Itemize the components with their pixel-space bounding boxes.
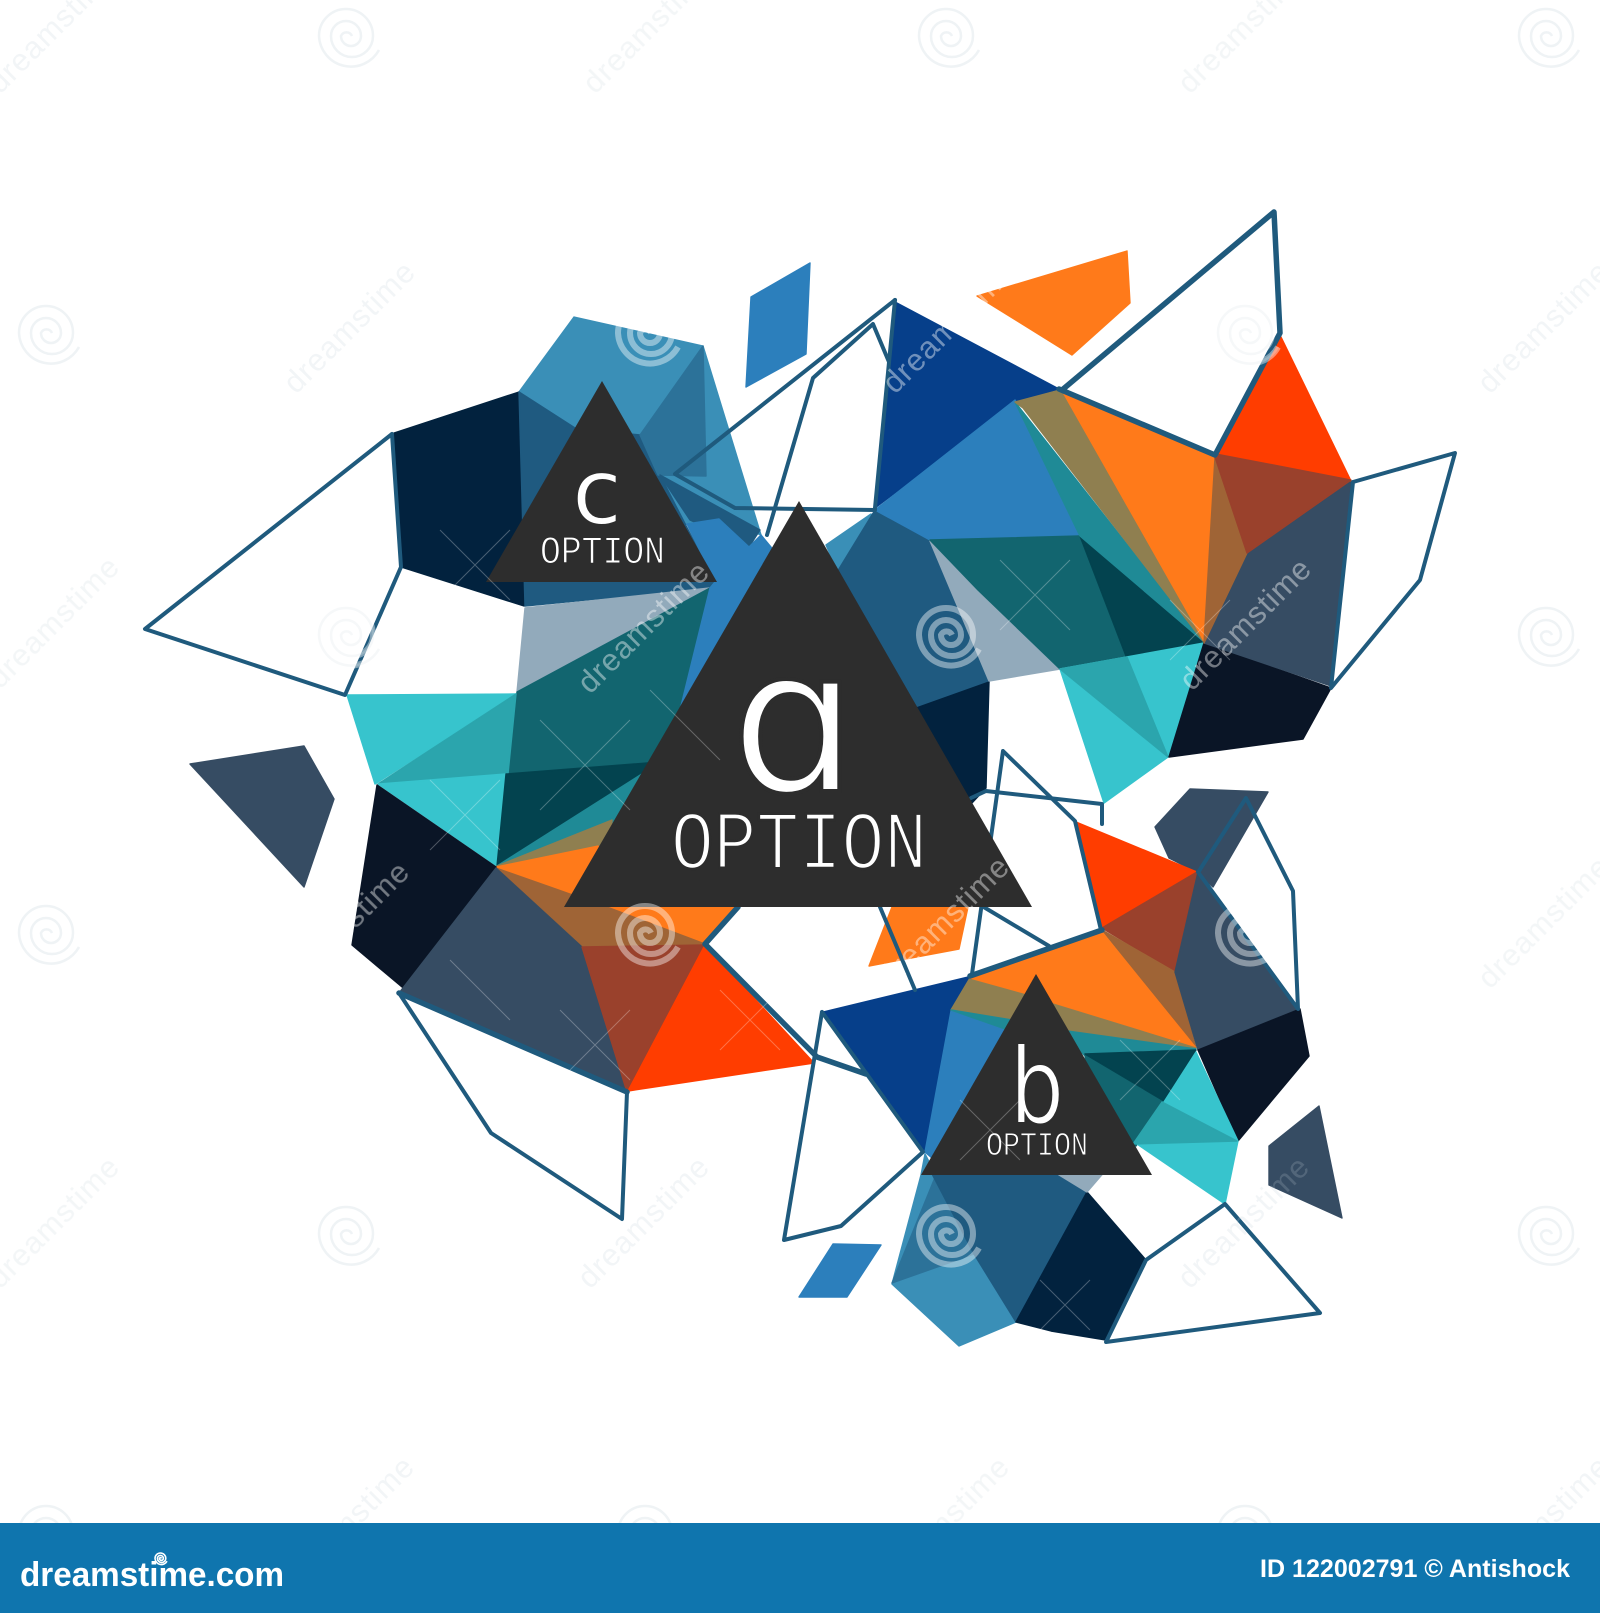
footer logo text: dreamstime.com: [20, 1556, 284, 1594]
watermark: strong spirals over colour: [319, 306, 1278, 1265]
facet: mid cyan: [1060, 657, 1168, 757]
facet: right tan: [1040, 1000, 1196, 1048]
panel: option b triangle: [921, 974, 1152, 1175]
outline: center kite: [972, 751, 1101, 974]
facet: red brown: [1102, 872, 1197, 972]
triangle a: [564, 501, 1032, 907]
facet: navy hexagon: [394, 392, 524, 606]
facet: brown: [496, 868, 705, 947]
outline: center short diagonal: [982, 906, 1049, 946]
facet: teal band: [1060, 1030, 1196, 1056]
facet: dark blue lower: [930, 1170, 1101, 1322]
facet: bright blue: [925, 1011, 1012, 1165]
facet: red: [628, 945, 814, 1091]
facet: brown: [1102, 930, 1196, 1048]
facet: brown: [1204, 457, 1247, 643]
outline: upper middle: [675, 300, 895, 510]
facet: black navy: [352, 785, 496, 992]
facet: mid blue upper right: [640, 346, 706, 476]
watermark: diagonal wordmarks: dreamstime: [1172, 551, 1319, 697]
facet: red: [1076, 822, 1197, 928]
shard: slate right: [1269, 1106, 1342, 1218]
facet: mid cyan: [378, 694, 516, 784]
facet: teal: [930, 536, 1126, 669]
letter c: c: [572, 440, 622, 545]
watermark: diagonal wordmarks: dreamstime: [276, 254, 423, 400]
footer background: [0, 1523, 1600, 1613]
facet: pale gray: [930, 541, 1060, 681]
facet: navy: [905, 682, 989, 804]
shard: blue parallelogram top: [746, 263, 810, 387]
outline: center diagonal: [880, 907, 915, 990]
facet: orange: [970, 932, 1196, 1048]
facet: medium blue behind triangle a: [826, 514, 880, 600]
facet: slate: [399, 868, 627, 1092]
facet: orange: [496, 846, 738, 944]
facet: mid blue wedge: [892, 1175, 974, 1283]
outline: center box: [971, 791, 1102, 824]
outline: slate lower edge: [399, 993, 627, 1092]
facet: cyan: [1060, 643, 1204, 803]
facet: tan band: [497, 820, 612, 866]
facet: slate: [1204, 481, 1353, 686]
facet: teal: [508, 588, 710, 775]
footer band: [0, 1523, 1600, 1613]
footer credit: ID 122002791 © Antishock: [1260, 1555, 1570, 1583]
facet: left tan: [951, 978, 1030, 1022]
facet: deep blue: [823, 976, 972, 1152]
icon: footer spiral: [155, 1553, 167, 1565]
label a: OPTION: [671, 799, 927, 893]
facet: teal band: [1015, 402, 1203, 641]
outline: lower middle: [784, 1012, 923, 1240]
facet: dark blue: [820, 510, 991, 712]
panel: option c triangle: [486, 381, 717, 582]
facet: teal: [1085, 1054, 1165, 1146]
outline: band above option b: [970, 930, 1102, 976]
cluster: option c polygon group: [394, 317, 761, 606]
shard: slate left: [190, 746, 334, 887]
floating shards: [190, 251, 1342, 1297]
shard: orange top: [977, 251, 1130, 355]
shard: orange center: [869, 907, 968, 966]
watermark: diagonal wordmarks: dreamstime: [870, 849, 1017, 995]
facet: red: [1217, 337, 1351, 481]
facet: red brown: [582, 945, 705, 1092]
outline: inner upper middle: [767, 324, 889, 535]
outline: far right: [1331, 453, 1455, 688]
facet: bright blue: [875, 400, 1086, 540]
panel: option a triangle: [564, 501, 1032, 907]
watermark: diagonal wordmarks: dreamstime: [275, 1449, 422, 1595]
label c: OPTION: [540, 531, 665, 575]
cluster: top right polygon group: [820, 302, 1353, 804]
outline: far left: [145, 434, 401, 695]
label b: OPTION: [986, 1128, 1088, 1165]
facet: mid cyan: [1133, 1102, 1237, 1144]
letter b: b: [1010, 1026, 1064, 1148]
facet: black navy: [1198, 1009, 1309, 1141]
facet: red brown: [1215, 454, 1351, 553]
facet: dark teal: [1085, 1050, 1196, 1101]
facet: pale gray: [1051, 1170, 1106, 1192]
facet: dark band: [660, 475, 760, 547]
outline: lower left: [399, 993, 627, 1219]
facet: dark teal: [1080, 536, 1204, 656]
triangle c: [486, 381, 717, 582]
facet: pale gray: [517, 588, 710, 692]
watermark: diagonal wordmarks: dreamstime: [870, 1449, 1017, 1595]
facet: top medium blue: [519, 317, 761, 590]
watermark: diagonal wordmarks: dreamstime: [570, 1149, 717, 1295]
facet: dark teal: [497, 762, 660, 866]
facet: tan band: [1015, 390, 1203, 641]
facet: slate top piece: [1155, 789, 1268, 887]
outline: lower right: [1106, 1204, 1320, 1342]
facet: slate: [1175, 872, 1298, 1050]
facet: bright blue sliver: [680, 519, 790, 710]
facet: deep blue: [875, 302, 1059, 508]
facet: orange: [1064, 394, 1215, 641]
triangle b: [921, 974, 1152, 1175]
cluster: option b polygon group: [823, 789, 1309, 1346]
watermark: diagonal wordmarks: dreamstime: [570, 554, 717, 700]
facet: dark blue behind triangle c: [519, 392, 715, 606]
facet: cyan: [1137, 1052, 1238, 1204]
watermark: diagonal wordmarks: dreamstime: [270, 854, 417, 1000]
outline: right of option b: [1198, 798, 1298, 1009]
shard: blue parallelogram bottom: [799, 1244, 881, 1297]
facet: medium blue lower: [892, 1154, 1016, 1346]
facet: cyan lower: [378, 774, 506, 866]
watermark: diagonal wordmarks: dreamstime: [875, 254, 1022, 400]
cluster: option a left polygon group: [347, 519, 814, 1092]
facet: black navy: [1169, 643, 1331, 757]
facet: teal band: [497, 772, 645, 866]
outline: top right: [1059, 212, 1280, 455]
facet: navy lower: [1016, 1192, 1146, 1340]
watermark: diagonal wordmarks: dreamstime: [1170, 1149, 1317, 1295]
facet: small teal: [951, 1010, 1012, 1030]
watermark: thin crosses: [430, 530, 1230, 1330]
outline: red piece edge: [705, 907, 866, 1074]
wireframe outlines: [145, 212, 1455, 1342]
facet: cyan upper: [347, 694, 516, 784]
letter a: ɑ: [731, 606, 857, 839]
outline: peak left edge: [875, 300, 895, 508]
